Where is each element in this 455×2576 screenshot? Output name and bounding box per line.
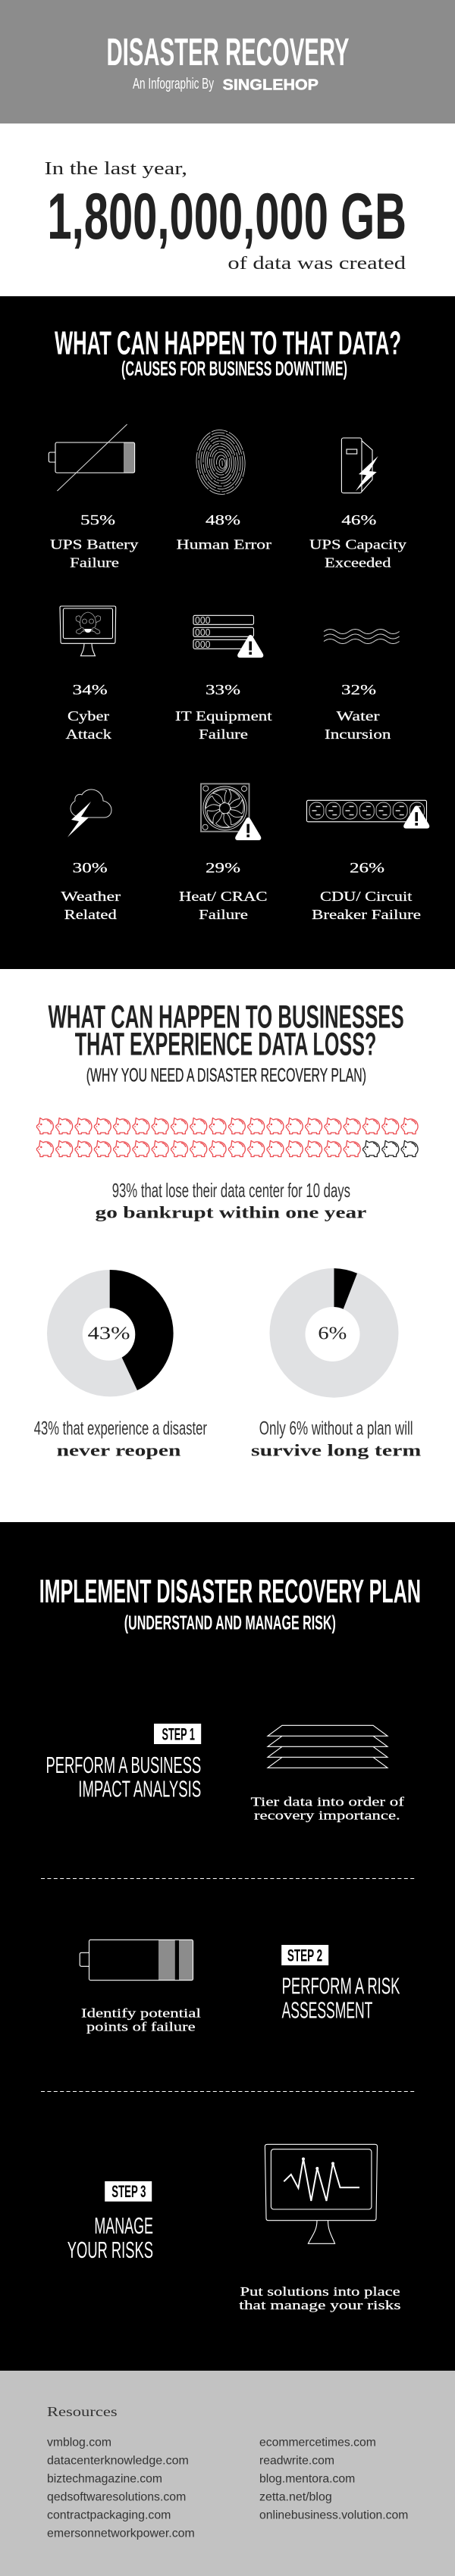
text: never reopen: 43% that experience a disaster — [34, 1418, 207, 1439]
stat: CDU / circuit breaker failure: 26% — [350, 861, 384, 877]
step 2 heading: ASSESSMENT — [282, 1997, 372, 2024]
resources list: right column — [259, 2436, 408, 2521]
stat: IT equipment failure: IT Equipment — [175, 708, 272, 724]
icon: stacked data tiers — [268, 1725, 388, 1768]
resources list: right column: readwrite.com — [259, 2454, 334, 2467]
resources heading: Resources — [47, 2404, 118, 2419]
resources list: left column: qedsoftwaresolutions.com — [47, 2490, 186, 2503]
stat: human error: Human Error — [177, 537, 271, 552]
step 3 description — [239, 2284, 400, 2312]
heading: business data loss — [49, 999, 404, 1063]
stat: cyber attack: Cyber — [67, 708, 109, 724]
stat: cyber attack: 34% — [73, 683, 108, 699]
stat: CDU / circuit breaker failure: CDU/ Circuit — [320, 889, 412, 904]
step 1 description: Tier data into order of — [251, 1794, 404, 1809]
icon: server rack with warning — [193, 615, 263, 658]
step 3 heading: YOUR RISKS — [67, 2237, 153, 2263]
step 3 heading — [67, 2212, 153, 2263]
chart: 6 percent donut — [270, 1268, 399, 1398]
step 3 badge: STEP 3 — [111, 2182, 146, 2201]
panel: implementation plan — [0, 1522, 455, 2371]
resources list: left column — [47, 2436, 195, 2540]
resources list: left column: biztechmagazine.com — [47, 2472, 162, 2485]
resources list: right column: blog.mentora.com — [259, 2472, 355, 2485]
resources list: right column: onlinebusiness.volution.com — [259, 2509, 408, 2521]
step 2 description: Identify potential — [81, 2006, 201, 2021]
resources list: right column: zetta.net/blog — [259, 2490, 332, 2503]
step 3 badge — [105, 2181, 152, 2202]
chart: 6 percent donut: 6% — [318, 1324, 347, 1343]
icon: water waves — [324, 629, 400, 644]
step 1 description: recovery importance. — [254, 1809, 400, 1823]
step 1 badge — [154, 1724, 201, 1744]
text: bankrupt statistic — [96, 1179, 367, 1221]
step 1 description — [251, 1794, 404, 1823]
stat: UPS battery failure: Failure — [70, 555, 119, 571]
byline: An Infographic By — [133, 76, 214, 92]
icon: server rack with warning: 000 — [195, 615, 211, 626]
resources list: left column: contractpackaging.com — [47, 2509, 171, 2521]
step 2 heading — [282, 1973, 400, 2024]
stat: cyber attack: Attack — [65, 727, 111, 742]
resources list: left column: datacenterknowledge.com — [47, 2454, 189, 2467]
icon: storm cloud — [67, 789, 111, 837]
icon: server with lightning — [341, 438, 378, 493]
stat: UPS capacity: Exceeded — [325, 555, 391, 571]
stat: weather related — [61, 861, 121, 922]
step 3 heading: MANAGE — [94, 2212, 153, 2239]
text: survive long term: survive long term — [251, 1441, 421, 1460]
text: never reopen: never reopen — [57, 1441, 180, 1460]
icon: failed battery — [49, 424, 135, 491]
icon: server rack with warning: 000 — [195, 639, 211, 650]
step 3 description: Put solutions into place — [240, 2284, 400, 2299]
stat: water incursion: Water — [337, 708, 379, 724]
stat: IT equipment failure — [175, 683, 272, 742]
chart: 43 percent donut — [47, 1270, 174, 1396]
stat: heat / CRAC failure: Failure — [199, 907, 248, 922]
icon: battery points of failure — [80, 1940, 193, 1980]
step 1 heading: PERFORM A BUSINESS — [46, 1752, 201, 1778]
outro text: of data was created — [228, 254, 406, 274]
intro text: In the last year, — [44, 159, 187, 179]
stat: UPS battery failure: 55% — [80, 513, 115, 529]
stat: UPS capacity — [309, 513, 406, 571]
text: never reopen — [34, 1418, 207, 1460]
stat: UPS battery failure — [50, 513, 138, 571]
pictogram: piggy banks 93 percent — [36, 1118, 418, 1157]
logo: SingleHop: SINGLEHOP — [223, 76, 318, 94]
stat: CDU / circuit breaker failure: Breaker Failure — [312, 907, 421, 922]
step 1 heading: IMPACT ANALYSIS — [78, 1776, 201, 1802]
stat: water incursion — [325, 683, 391, 742]
resources list: left column: emersonnetworkpower.com — [47, 2527, 195, 2540]
panel: resources — [0, 2371, 455, 2576]
stat: weather related: Weather — [61, 889, 121, 904]
stat: UPS battery failure: UPS Battery — [50, 537, 138, 552]
step 2 description: points of failure — [86, 2020, 196, 2034]
stat: UPS capacity: UPS Capacity — [309, 537, 406, 552]
icon: power strip with warning — [306, 800, 429, 829]
stat: water incursion: Incursion — [325, 727, 391, 742]
chart: 43 percent donut: 43% — [88, 1324, 130, 1343]
stat: IT equipment failure: 33% — [206, 683, 240, 699]
panel: data created statistic — [0, 123, 455, 296]
panel: business data loss — [0, 969, 455, 1522]
panel: causes for business downtime — [0, 296, 455, 969]
step 2 badge: STEP 2 — [287, 1946, 322, 1965]
stat: heat / CRAC failure: Heat/ CRAC — [179, 889, 267, 904]
icon: monitor with skull — [60, 606, 116, 656]
stat: heat / CRAC failure — [179, 861, 267, 922]
icon: monitor with pulse chart — [265, 2144, 378, 2243]
stat: weather related: 30% — [73, 861, 108, 877]
stat: water incursion: 32% — [341, 683, 376, 699]
icon: fingerprint — [194, 428, 247, 496]
stat: IT equipment failure: Failure — [199, 727, 248, 742]
stat: human error: 48% — [206, 513, 240, 529]
stat: UPS capacity: 46% — [341, 513, 377, 529]
stat: weather related: Related — [64, 907, 117, 922]
stat: cyber attack — [65, 683, 111, 742]
step 1 heading — [46, 1752, 201, 1802]
panel: header — [0, 0, 455, 123]
step 2 badge — [281, 1945, 328, 1965]
stat: human error — [177, 513, 271, 552]
stat: CDU / circuit breaker failure — [312, 861, 421, 922]
step 2 description — [81, 2006, 201, 2034]
icon: server rack with warning: 000 — [195, 627, 211, 638]
step 1 badge: STEP 1 — [162, 1725, 195, 1744]
resources list: left column: vmblog.com — [47, 2436, 111, 2449]
step 3 description: that manage your risks — [239, 2298, 400, 2312]
stat: heat / CRAC failure: 29% — [206, 861, 240, 877]
resources list: right column: ecommercetimes.com — [259, 2436, 376, 2449]
text: survive long term — [251, 1418, 421, 1460]
text: bankrupt statistic: go bankrupt within one year — [96, 1203, 367, 1221]
icon: cooling fan with warning — [201, 783, 261, 840]
